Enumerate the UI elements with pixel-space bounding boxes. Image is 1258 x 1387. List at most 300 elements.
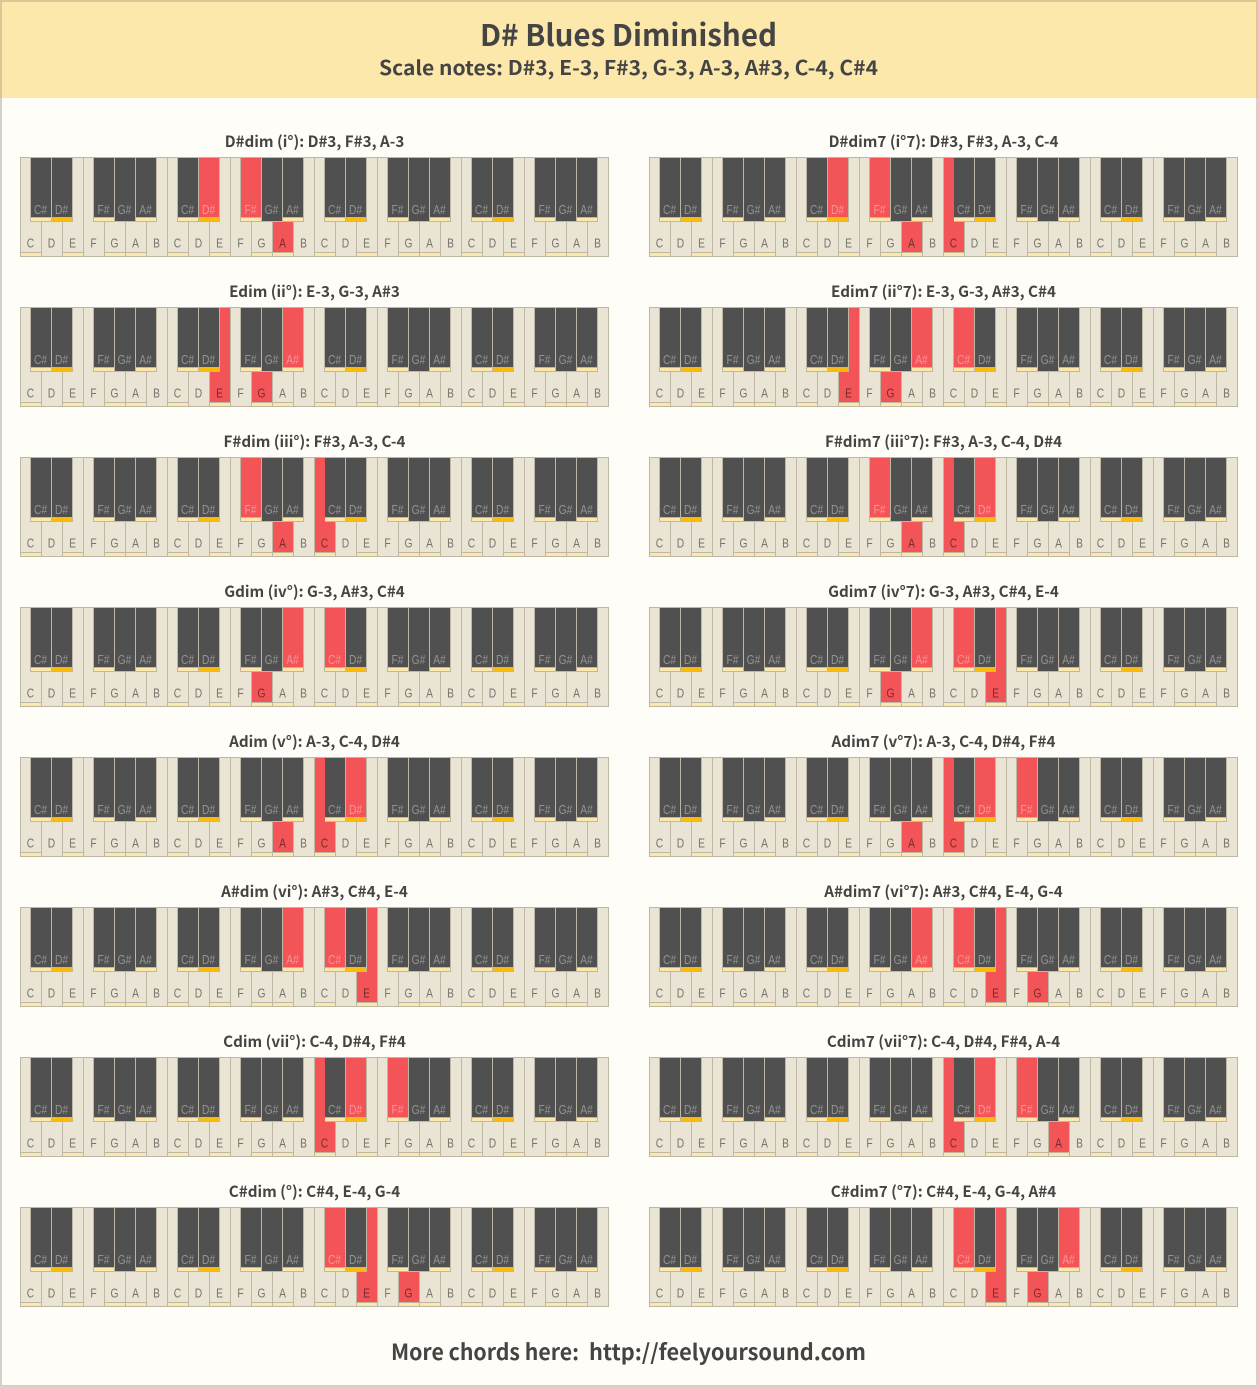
keyboard: F# [727,954,739,967]
keyboard: C# [328,354,342,367]
keyboard: D# [349,1254,363,1267]
keyboard: C# [181,654,195,667]
keyboard: A# [768,354,781,367]
keyboard: F# [727,204,739,217]
keyboard: C# [475,204,489,217]
keyboard: A# [139,1254,152,1267]
keyboard: F# [539,804,551,817]
keyboard: G# [559,804,573,817]
heading: Edim7 (ii°7): E-3, G-3, A#3, C#4 [831,280,1056,302]
keyboard: A# [768,504,781,517]
keyboard: C# [1104,354,1118,367]
panel: C#dim chord [20,1180,608,1306]
keyboard: A# [768,804,781,817]
keyboard: F# [1168,804,1180,817]
keyboard: F# [98,504,110,517]
keyboard: C# [957,504,971,517]
keyboard: F# [1168,354,1180,367]
keyboard: F# [1168,654,1180,667]
keyboard: C# [34,354,48,367]
keyboard: D# [496,354,510,367]
keyboard: C# [328,1254,342,1267]
keyboard: D# [55,954,69,967]
heading: Edim (ii°): E-3, G-3, A#3 [229,280,400,302]
keyboard: D# [202,1104,216,1117]
keyboard [20,608,608,706]
keyboard: A# [580,654,593,667]
keyboard: D# [202,654,216,667]
keyboard: CDEFGABCDEFGABCDEFGABCDEFGAB [656,388,1230,401]
keyboard: A# [1062,1254,1075,1267]
keyboard: A# [286,954,299,967]
keyboard [20,1058,608,1156]
keyboard: C# [1104,954,1118,967]
keyboard: G# [1041,354,1055,367]
keyboard: CDEFGABCDEFGABCDEFGABCDEFGAB [656,688,1230,701]
header banner [0,0,1258,98]
heading: Gdim7 (iv°7): G-3, A#3, C#4, E-4 [828,580,1059,602]
keyboard: G# [1188,504,1202,517]
keyboard: A# [915,1104,928,1117]
keyboard: C# [34,654,48,667]
keyboard: C# [34,1254,48,1267]
keyboard: D# [1125,1254,1139,1267]
keyboard: A# [433,1254,446,1267]
keyboard: C# [810,354,824,367]
keyboard: F# [98,654,110,667]
keyboard: C# [663,804,677,817]
keyboard: A# [433,1104,446,1117]
keyboard: C# [663,204,677,217]
heading: F#dim (iii°): F#3, A-3, C-4 [223,430,406,452]
keyboard: C# [663,504,677,517]
keyboard: F# [874,654,886,667]
keyboard: A# [1209,504,1222,517]
keyboard: CDEFGABCDEFGABCDEFGABCDEFGAB [27,1288,601,1301]
keyboard: G# [118,504,132,517]
keyboard: D# [684,804,698,817]
keyboard: D# [55,1254,69,1267]
keyboard: F# [392,204,404,217]
panel: Adim7 chord [650,730,1238,856]
keyboard: F# [392,804,404,817]
keyboard: C# [475,1104,489,1117]
keyboard: A# [139,954,152,967]
panel: Cdim chord [20,1030,608,1156]
keyboard: F# [98,204,110,217]
keyboard: F# [1168,1104,1180,1117]
keyboard: A# [580,954,593,967]
keyboard: A# [139,204,152,217]
keyboard: G# [1188,1104,1202,1117]
keyboard: D# [831,954,845,967]
keyboard: C# [181,1104,195,1117]
keyboard: F# [874,1254,886,1267]
keyboard: C# [475,504,489,517]
keyboard: A# [1209,1254,1222,1267]
keyboard: A# [433,954,446,967]
keyboard: A# [286,1254,299,1267]
keyboard: D# [1125,204,1139,217]
keyboard: G# [747,504,761,517]
keyboard: F# [245,204,257,217]
keyboard: D# [349,804,363,817]
keyboard: D# [831,1104,845,1117]
keyboard: G# [1041,1104,1055,1117]
keyboard: D# [831,1254,845,1267]
keyboard: C# [475,954,489,967]
keyboard: G# [1041,1254,1055,1267]
keyboard: A# [139,654,152,667]
keyboard: D# [684,204,698,217]
keyboard [650,458,1238,556]
keyboard [20,158,608,256]
keyboard: D# [978,504,992,517]
keyboard: G# [1041,204,1055,217]
keyboard: CDEFGABCDEFGABCDEFGABCDEFGAB [27,538,601,551]
keyboard: D# [978,204,992,217]
heading: C#dim (°): C#4, E-4, G-4 [229,1180,400,1202]
keyboard: D# [349,954,363,967]
keyboard: F# [1021,1104,1033,1117]
keyboard: C# [810,504,824,517]
keyboard: A# [139,1104,152,1117]
keyboard: F# [98,1104,110,1117]
keyboard: C# [181,1254,195,1267]
keyboard: D# [684,504,698,517]
keyboard: C# [810,654,824,667]
keyboard: A# [1209,1104,1222,1117]
keyboard: G# [559,1104,573,1117]
keyboard: G# [265,354,279,367]
keyboard: F# [245,654,257,667]
keyboard: G# [118,1104,132,1117]
keyboard: A# [768,1254,781,1267]
keyboard: A# [580,1104,593,1117]
keyboard: F# [727,504,739,517]
keyboard: F# [245,354,257,367]
keyboard: C# [328,954,342,967]
keyboard: D# [684,354,698,367]
keyboard: A# [915,1254,928,1267]
panel: Edim7 chord [650,280,1238,406]
keyboard: C# [181,354,195,367]
keyboard: F# [727,804,739,817]
keyboard [20,908,608,1006]
keyboard: F# [1021,354,1033,367]
keyboard: G# [747,354,761,367]
panel: D#dim chord [20,130,608,256]
keyboard: A# [286,804,299,817]
keyboard: D# [496,1254,510,1267]
keyboard: F# [1168,954,1180,967]
keyboard: F# [1021,504,1033,517]
heading: A#dim (vi°): A#3, C#4, E-4 [220,880,408,902]
keyboard: G# [412,354,426,367]
keyboard: G# [1188,804,1202,817]
keyboard: G# [1188,654,1202,667]
keyboard: F# [539,1254,551,1267]
keyboard [20,458,608,556]
heading: D#dim7 (i°7): D#3, F#3, A-3, C-4 [829,130,1058,152]
keyboard: D# [202,804,216,817]
keyboard: CDEFGABCDEFGABCDEFGABCDEFGAB [27,688,601,701]
keyboard: C# [328,804,342,817]
keyboard: F# [392,654,404,667]
keyboard: C# [1104,654,1118,667]
keyboard: A# [580,504,593,517]
keyboard: C# [810,204,824,217]
panel: Edim chord [20,280,608,406]
keyboard: G# [118,204,132,217]
keyboard: F# [727,654,739,667]
keyboard: A# [433,654,446,667]
keyboard: F# [245,1104,257,1117]
keyboard: D# [684,1104,698,1117]
keyboard: D# [978,1104,992,1117]
keyboard: D# [978,1254,992,1267]
keyboard [20,308,608,406]
keyboard: G# [559,204,573,217]
keyboard: C# [328,204,342,217]
keyboard: D# [684,1254,698,1267]
keyboard [650,1208,1238,1306]
keyboard: D# [831,804,845,817]
keyboard: D# [1125,804,1139,817]
keyboard: G# [1188,954,1202,967]
keyboard: A# [768,954,781,967]
keyboard: F# [98,354,110,367]
keyboard: G# [118,954,132,967]
keyboard: D# [349,1104,363,1117]
keyboard: G# [265,204,279,217]
keyboard: D# [349,354,363,367]
keyboard: D# [55,804,69,817]
keyboard: F# [1021,804,1033,817]
keyboard: G# [559,654,573,667]
keyboard: G# [559,954,573,967]
keyboard: C# [957,354,971,367]
keyboard: G# [559,504,573,517]
keyboard: A# [1209,954,1222,967]
panel: C#dim7 chord [650,1180,1238,1306]
heading: Cdim7 (vii°7): C-4, D#4, F#4, A-4 [827,1030,1060,1052]
heading: Adim7 (v°7): A-3, C-4, D#4, F#4 [831,730,1055,752]
keyboard: A# [1062,1104,1075,1117]
keyboard: F# [874,504,886,517]
heading: C#dim7 (°7): C#4, E-4, G-4, A#4 [831,1180,1056,1202]
keyboard: G# [265,1104,279,1117]
keyboard: CDEFGABCDEFGABCDEFGABCDEFGAB [27,988,601,1001]
keyboard: A# [580,354,593,367]
keyboard: C# [34,504,48,517]
keyboard: G# [894,504,908,517]
keyboard: F# [727,1254,739,1267]
keyboard: A# [915,654,928,667]
keyboard: F# [245,1254,257,1267]
keyboard: G# [265,804,279,817]
keyboard: G# [412,204,426,217]
keyboard: F# [98,804,110,817]
keyboard: D# [978,654,992,667]
keyboard: C# [810,1254,824,1267]
keyboard: C# [663,354,677,367]
keyboard: C# [810,1104,824,1117]
keyboard: CDEFGABCDEFGABCDEFGABCDEFGAB [656,1288,1230,1301]
keyboard: C# [810,804,824,817]
keyboard: G# [747,654,761,667]
keyboard: A# [1062,804,1075,817]
keyboard: D# [831,204,845,217]
heading: F#dim7 (iii°7): F#3, A-3, C-4, D#4 [825,430,1062,452]
keyboard: C# [34,204,48,217]
keyboard: G# [1041,654,1055,667]
heading: Adim (v°): A-3, C-4, D#4 [228,730,400,752]
keyboard: D# [202,354,216,367]
keyboard: D# [978,804,992,817]
keyboard: D# [1125,954,1139,967]
keyboard: C# [957,954,971,967]
keyboard: D# [831,654,845,667]
keyboard: D# [1125,504,1139,517]
keyboard: CDEFGABCDEFGABCDEFGABCDEFGAB [27,388,601,401]
keyboard: CDEFGABCDEFGABCDEFGABCDEFGAB [656,838,1230,851]
keyboard: C# [957,1254,971,1267]
keyboard: F# [1168,204,1180,217]
keyboard: C# [810,954,824,967]
keyboard: D# [496,204,510,217]
keyboard: G# [747,804,761,817]
keyboard [650,908,1238,1006]
keyboard: G# [894,804,908,817]
keyboard: A# [915,504,928,517]
scale notes subtitle: Scale notes: D#3, E-3, F#3, G-3, A-3, A#3, C-4, C#4 [379,52,878,81]
keyboard: A# [139,504,152,517]
keyboard: D# [202,1254,216,1267]
keyboard: G# [265,654,279,667]
panel: Adim chord [20,730,608,856]
keyboard: C# [181,504,195,517]
keyboard: F# [539,204,551,217]
keyboard: F# [874,204,886,217]
keyboard: D# [202,954,216,967]
keyboard: G# [894,1254,908,1267]
keyboard: C# [475,354,489,367]
keyboard: C# [1104,204,1118,217]
keyboard: A# [1062,504,1075,517]
keyboard: C# [181,954,195,967]
panel: F#dim7 chord [650,430,1238,556]
keyboard: C# [1104,1104,1118,1117]
keyboard [650,1058,1238,1156]
keyboard: D# [684,654,698,667]
keyboard: A# [1062,354,1075,367]
keyboard: F# [98,1254,110,1267]
keyboard: F# [539,954,551,967]
keyboard: F# [539,654,551,667]
keyboard: C# [475,1254,489,1267]
keyboard: C# [34,954,48,967]
keyboard: G# [412,654,426,667]
keyboard: D# [496,1104,510,1117]
keyboard: D# [349,204,363,217]
keyboard: C# [663,654,677,667]
keyboard: G# [118,804,132,817]
keyboard: G# [894,354,908,367]
keyboard: G# [118,1254,132,1267]
keyboard: G# [118,654,132,667]
keyboard: F# [98,954,110,967]
keyboard: C# [663,1254,677,1267]
keyboard: A# [1062,204,1075,217]
keyboard: F# [245,504,257,517]
keyboard: G# [265,504,279,517]
keyboard: A# [286,654,299,667]
keyboard: G# [412,504,426,517]
heading: A#dim7 (vi°7): A#3, C#4, E-4, G-4 [823,880,1063,902]
keyboard: D# [684,954,698,967]
keyboard: A# [1062,654,1075,667]
keyboard: A# [580,804,593,817]
keyboard [650,758,1238,856]
heading: D#dim (i°): D#3, F#3, A-3 [225,130,404,152]
keyboard: D# [496,504,510,517]
keyboard: G# [412,804,426,817]
keyboard: C# [475,654,489,667]
keyboard: C# [34,804,48,817]
footer link text: More chords here: [391,1335,579,1367]
footer link text: http://feelyoursound.com [589,1335,866,1367]
keyboard: G# [559,1254,573,1267]
keyboard: D# [349,504,363,517]
keyboard: F# [874,354,886,367]
title: D# Blues Diminished [480,11,777,55]
keyboard: D# [496,654,510,667]
keyboard: D# [1125,354,1139,367]
keyboard: A# [286,1104,299,1117]
keyboard: G# [412,1254,426,1267]
keyboard: A# [433,504,446,517]
keyboard: F# [539,504,551,517]
keyboard: D# [55,504,69,517]
keyboard: G# [747,1104,761,1117]
panel: F#dim chord [20,430,608,556]
keyboard: F# [1021,204,1033,217]
keyboard: F# [539,354,551,367]
keyboard: F# [392,1254,404,1267]
keyboard: A# [1209,654,1222,667]
keyboard: F# [392,504,404,517]
keyboard: A# [915,354,928,367]
keyboard: C# [328,1104,342,1117]
keyboard: C# [1104,504,1118,517]
keyboard: G# [1041,504,1055,517]
keyboard: G# [265,954,279,967]
keyboard: D# [831,354,845,367]
keyboard: D# [202,204,216,217]
keyboard: F# [727,354,739,367]
keyboard: A# [433,204,446,217]
keyboard: F# [727,1104,739,1117]
keyboard: F# [1168,504,1180,517]
keyboard: C# [957,654,971,667]
keyboard: A# [915,954,928,967]
panel: Cdim7 chord [650,1030,1238,1156]
keyboard: G# [747,1254,761,1267]
keyboard: F# [1021,654,1033,667]
keyboard [650,158,1238,256]
keyboard: D# [349,654,363,667]
